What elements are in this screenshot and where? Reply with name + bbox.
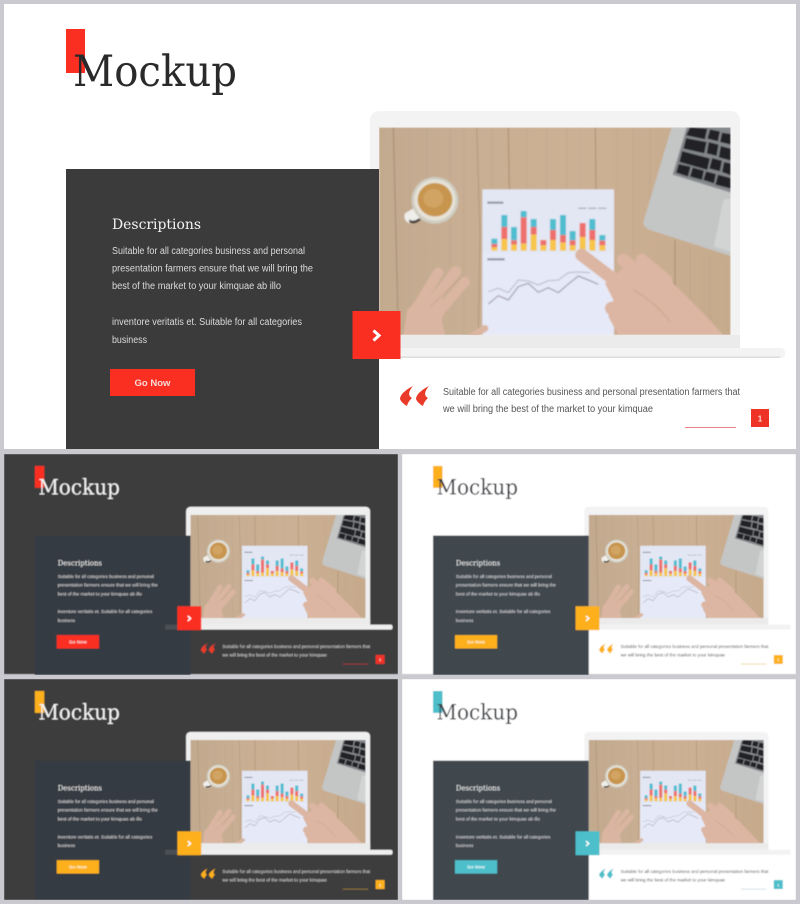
panel body text: business bbox=[112, 335, 147, 346]
panel heading: Descriptions bbox=[456, 785, 501, 793]
quote text bbox=[621, 644, 769, 658]
base shadow bbox=[165, 850, 180, 855]
panel body text: inventore veritatis et. Suitable for all categories bbox=[456, 834, 551, 840]
button: Go Now bbox=[467, 640, 485, 646]
panel body text: business bbox=[456, 843, 474, 849]
icon: quote mark bbox=[201, 869, 215, 879]
button: Go Now bbox=[69, 865, 87, 871]
accent block bbox=[433, 466, 442, 488]
panel body text: inventore veritatis et. Suitable for all categories bbox=[58, 834, 153, 840]
panel body text: best of the market to your kimquae ab illo bbox=[58, 591, 142, 597]
panel body text: presentation farmers ensure that we will bring the bbox=[58, 808, 158, 814]
panel heading: Descriptions bbox=[112, 217, 201, 233]
panel: descriptions bbox=[66, 169, 379, 449]
panel body text: presentation farmers ensure that we will bring the bbox=[58, 583, 158, 589]
laptop mockup bbox=[177, 732, 393, 855]
title: Mockup bbox=[38, 475, 120, 500]
panel body text bbox=[112, 246, 313, 346]
panel: descriptions bbox=[35, 761, 191, 900]
panel body text: presentation farmers ensure that we will bring the bbox=[456, 808, 556, 814]
icon: quote mark bbox=[599, 869, 614, 879]
panel body text: presentation farmers ensure that we will bring the bbox=[112, 264, 313, 274]
page number bbox=[774, 880, 783, 889]
title: Mockup bbox=[437, 700, 518, 725]
page number: 1 bbox=[777, 657, 780, 662]
quote text bbox=[442, 387, 740, 415]
quote text bbox=[222, 644, 371, 658]
accent block bbox=[35, 691, 44, 713]
laptop mockup bbox=[575, 732, 791, 855]
quote text: Suitable for all categories business and personal presentation farmers that bbox=[222, 869, 371, 875]
panel body text: Suitable for all categories business and personal bbox=[112, 246, 305, 257]
panel body text: business bbox=[58, 618, 76, 624]
icon: quote mark bbox=[400, 386, 429, 406]
underline bbox=[741, 888, 766, 891]
slide 1: large white red bbox=[4, 4, 796, 449]
underline bbox=[741, 663, 766, 665]
panel body text: inventore veritatis et. Suitable for all categories bbox=[112, 317, 302, 328]
icon: quote mark bbox=[201, 644, 215, 653]
page number bbox=[751, 409, 769, 427]
panel body text bbox=[456, 799, 556, 849]
panel body text: inventore veritatis et. Suitable for all categories bbox=[456, 609, 551, 615]
panel heading: Descriptions bbox=[456, 559, 501, 567]
button bbox=[57, 635, 99, 649]
panel body text: inventore veritatis et. Suitable for all categories bbox=[58, 609, 153, 615]
accent block bbox=[66, 29, 85, 73]
button: Go Now bbox=[69, 640, 87, 646]
panel body text bbox=[58, 574, 158, 624]
quote text: Suitable for all categories business and personal presentation farmers that bbox=[222, 644, 371, 650]
button: Go Now bbox=[135, 378, 171, 389]
button bbox=[57, 860, 99, 874]
underline bbox=[685, 427, 736, 428]
laptop mockup bbox=[352, 111, 785, 358]
quote text: Suitable for all categories business and personal presentation farmers that bbox=[621, 869, 769, 875]
panel body text bbox=[58, 799, 158, 849]
page number bbox=[376, 655, 385, 664]
panel body text: presentation farmers ensure that we will bring the bbox=[456, 583, 556, 589]
panel body text: best of the market to your kimquae ab illo bbox=[456, 816, 540, 822]
page number: 1 bbox=[777, 882, 780, 887]
arrow button bbox=[352, 311, 400, 359]
panel body text: Suitable for all categories business and personal bbox=[58, 799, 154, 805]
slide 3: small white orange bbox=[402, 454, 796, 675]
panel body text: Suitable for all categories business and personal bbox=[58, 574, 154, 580]
quote text bbox=[222, 869, 371, 884]
laptop mockup bbox=[177, 507, 393, 630]
panel body text: Suitable for all categories business and personal bbox=[456, 574, 552, 580]
panel heading: Descriptions bbox=[58, 559, 102, 567]
title: Mockup bbox=[73, 47, 237, 97]
quote text: we will bring the best of the market to your kimquae bbox=[222, 652, 327, 658]
accent block bbox=[35, 466, 44, 488]
page number: 1 bbox=[379, 882, 382, 887]
underline bbox=[343, 888, 368, 891]
panel body text: best of the market to your kimquae ab illo bbox=[456, 591, 540, 597]
slide 2: small dark red bbox=[4, 454, 398, 675]
panel body text: best of the market to your kimquae ab illo bbox=[112, 281, 281, 292]
page number bbox=[376, 880, 385, 889]
title: Mockup bbox=[38, 700, 120, 725]
slide 4: small dark orange bbox=[4, 679, 398, 900]
quote text: we will bring the best of the market to your kimquae bbox=[222, 878, 327, 884]
panel: descriptions bbox=[433, 761, 589, 900]
panel: descriptions bbox=[433, 536, 589, 675]
quote text bbox=[621, 869, 769, 884]
slide 5: small white teal bbox=[402, 679, 796, 900]
base shadow bbox=[165, 625, 180, 630]
icon: quote mark bbox=[599, 644, 614, 653]
quote text: Suitable for all categories business and personal presentation farmers that bbox=[443, 387, 740, 398]
quote text: we will bring the best of the market to your kimquae bbox=[442, 404, 653, 415]
arrow button bbox=[177, 831, 201, 855]
button bbox=[455, 860, 497, 874]
quote text: we will bring the best of the market to your kimquae bbox=[621, 652, 725, 658]
panel body text: business bbox=[456, 618, 474, 624]
panel body text: business bbox=[58, 843, 76, 849]
panel body text: Suitable for all categories business and personal bbox=[456, 799, 552, 805]
panel body text: best of the market to your kimquae ab illo bbox=[58, 816, 142, 822]
page number: 1 bbox=[758, 414, 763, 424]
button bbox=[110, 369, 195, 396]
button: Go Now bbox=[467, 865, 485, 871]
laptop mockup bbox=[575, 507, 791, 630]
arrow button bbox=[576, 606, 599, 630]
panel heading: Descriptions bbox=[58, 785, 102, 793]
page number bbox=[774, 655, 783, 664]
button bbox=[455, 635, 497, 649]
quote text: we will bring the best of the market to your kimquae bbox=[621, 878, 725, 884]
accent block bbox=[433, 691, 442, 713]
arrow button bbox=[576, 831, 599, 855]
panel: descriptions bbox=[35, 536, 191, 675]
arrow button bbox=[177, 606, 201, 630]
quote text: Suitable for all categories business and personal presentation farmers that bbox=[621, 644, 769, 650]
page number: 1 bbox=[379, 657, 382, 662]
title: Mockup bbox=[437, 475, 518, 500]
panel body text bbox=[456, 574, 556, 624]
underline bbox=[343, 663, 368, 665]
